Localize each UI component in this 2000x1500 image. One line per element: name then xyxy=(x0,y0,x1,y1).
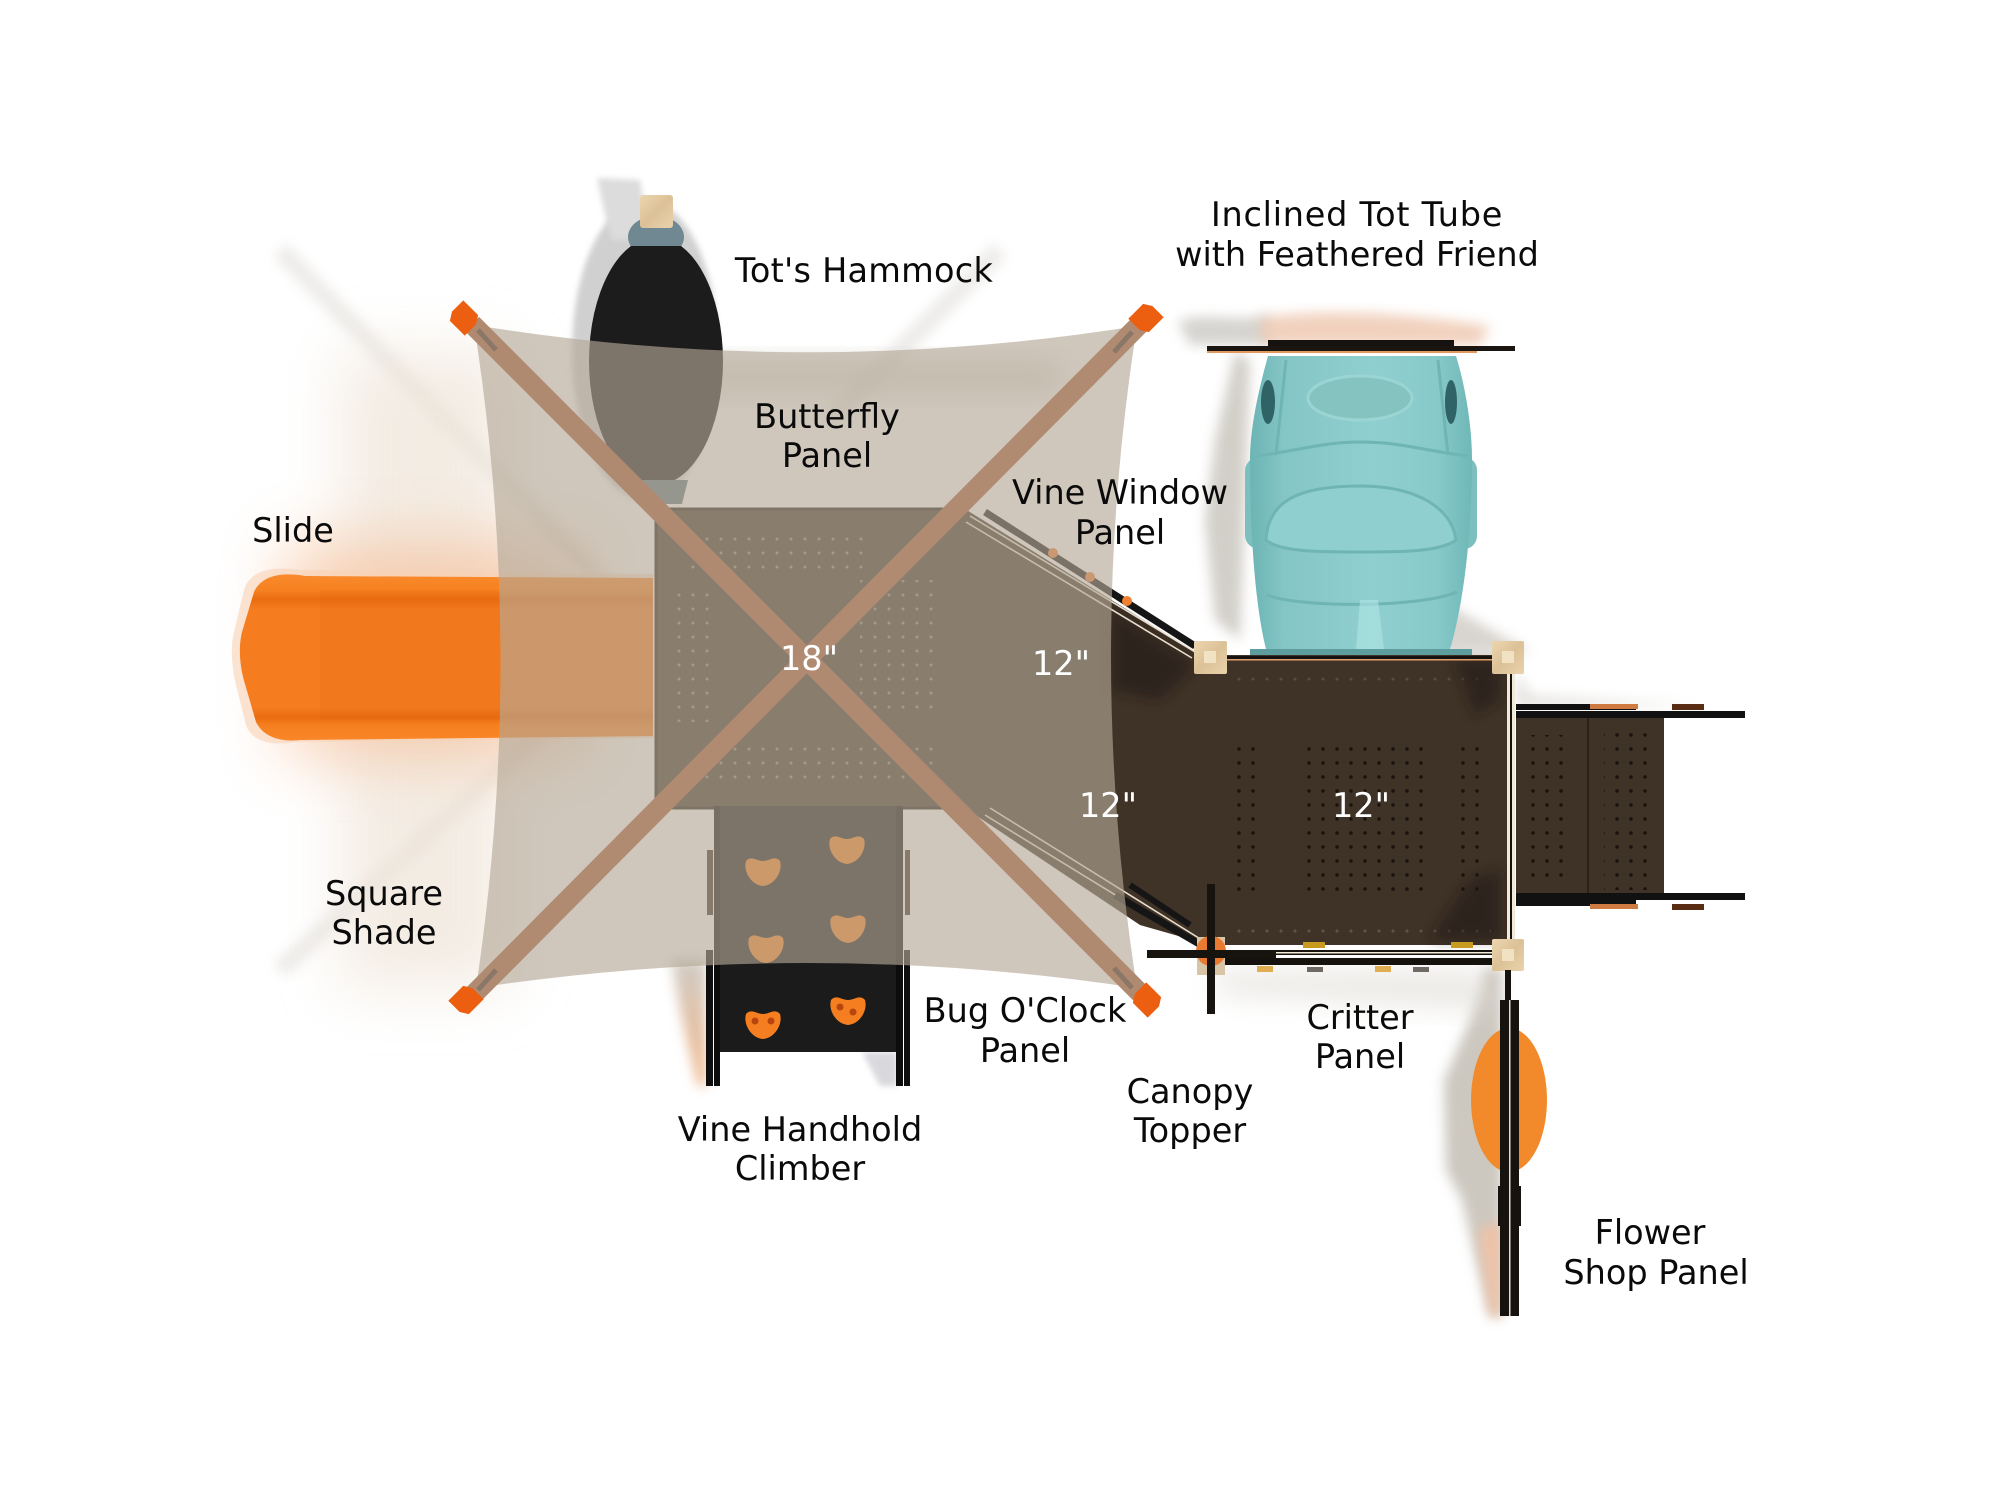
pole diagonal 1 xyxy=(472,324,1143,996)
label: flower shop panel: Flower xyxy=(1595,1213,1705,1252)
label: square shade: Square xyxy=(325,874,443,913)
lower ramp rail xyxy=(985,808,1210,950)
corner bracket top left xyxy=(446,300,482,336)
feathered friend panel xyxy=(1207,340,1515,353)
platform bottom rail xyxy=(1516,893,1745,900)
hammock xyxy=(589,195,723,504)
corner bracket bottom left xyxy=(448,982,484,1018)
label: vine handhold climber: Climber xyxy=(735,1149,865,1188)
inclined tot tube xyxy=(1245,356,1477,655)
hammock post xyxy=(640,195,673,228)
flower shop panel xyxy=(1471,970,1547,1316)
label: canopy topper: Topper xyxy=(1133,1111,1246,1150)
climber rail shadow xyxy=(672,960,706,1086)
hammock cap top xyxy=(628,216,684,258)
label: inclined tot tube: Inclined Tot Tube xyxy=(1211,195,1503,234)
deck shadows xyxy=(1112,610,1500,940)
right platform xyxy=(1516,704,1745,910)
tube highlight xyxy=(1356,600,1384,649)
deck side rails xyxy=(656,509,965,808)
platform top rail xyxy=(1516,711,1745,718)
corner bracket top right xyxy=(1128,300,1164,336)
tube body xyxy=(1250,356,1472,649)
tube shadow xyxy=(1205,352,1250,640)
tube side bulges xyxy=(1245,457,1275,549)
label: critter panel: Critter xyxy=(1306,998,1414,1037)
tube flange xyxy=(1250,649,1472,655)
tube panel shadow xyxy=(1178,314,1270,345)
tube details xyxy=(1258,360,1468,604)
hammock seat xyxy=(589,237,723,485)
slide xyxy=(232,569,653,743)
label: flower shop panel: Shop Panel xyxy=(1563,1253,1749,1292)
label: butterfly panel: Panel xyxy=(782,436,872,475)
label: vine window panel: Panel xyxy=(1075,513,1165,552)
label: critter panel: Panel xyxy=(1315,1037,1405,1076)
height: 12 inch deck: 12" xyxy=(1332,786,1390,825)
label: bug o'clock panel: Bug O'Clock xyxy=(924,991,1126,1030)
handhold bolts xyxy=(752,1004,856,1024)
label: square shade: Shade xyxy=(332,913,436,952)
tube windows xyxy=(1261,380,1275,424)
label: slide: Slide xyxy=(252,511,334,550)
pole diagonal 2 xyxy=(472,324,1140,996)
pole slots xyxy=(478,330,1132,990)
height: 12 inch ramp lower: 12" xyxy=(1079,786,1137,825)
label: bug o'clock panel: Panel xyxy=(980,1031,1070,1070)
flower orange disc xyxy=(1471,1028,1547,1172)
square shade canopy xyxy=(474,325,1137,988)
handholds xyxy=(745,836,866,1039)
hammock shadow xyxy=(572,200,718,500)
hammock cap bottom xyxy=(632,480,688,504)
flower panel edge xyxy=(1505,970,1511,1002)
label: vine handhold climber: Vine Handhold xyxy=(678,1110,922,1149)
posts xyxy=(1194,641,1524,971)
height: 18 inch: 18" xyxy=(780,639,838,678)
height: 12 inch ramp upper: 12" xyxy=(1032,644,1090,683)
flower panel shadow xyxy=(1444,968,1502,1316)
label: butterfly panel: Butterfly xyxy=(754,397,900,436)
canopy topper xyxy=(1147,884,1276,1014)
top deck rail xyxy=(1227,656,1515,940)
deck and ramps xyxy=(656,509,1512,950)
label: inclined tot tube: with Feathered Friend xyxy=(1175,235,1539,274)
label: canopy topper: Canopy xyxy=(1127,1072,1253,1111)
corner bracket bottom right xyxy=(1129,982,1165,1018)
vine handhold climber xyxy=(706,806,910,1086)
upper ramp rail xyxy=(966,516,1195,658)
critter panel xyxy=(1225,942,1493,972)
perforations xyxy=(675,528,1491,940)
cast shadows xyxy=(280,178,1700,1316)
shade poles xyxy=(446,300,1165,1018)
label: vine window panel: Vine Window xyxy=(1012,473,1228,512)
label: tot's hammock: Tot's Hammock xyxy=(734,251,993,290)
